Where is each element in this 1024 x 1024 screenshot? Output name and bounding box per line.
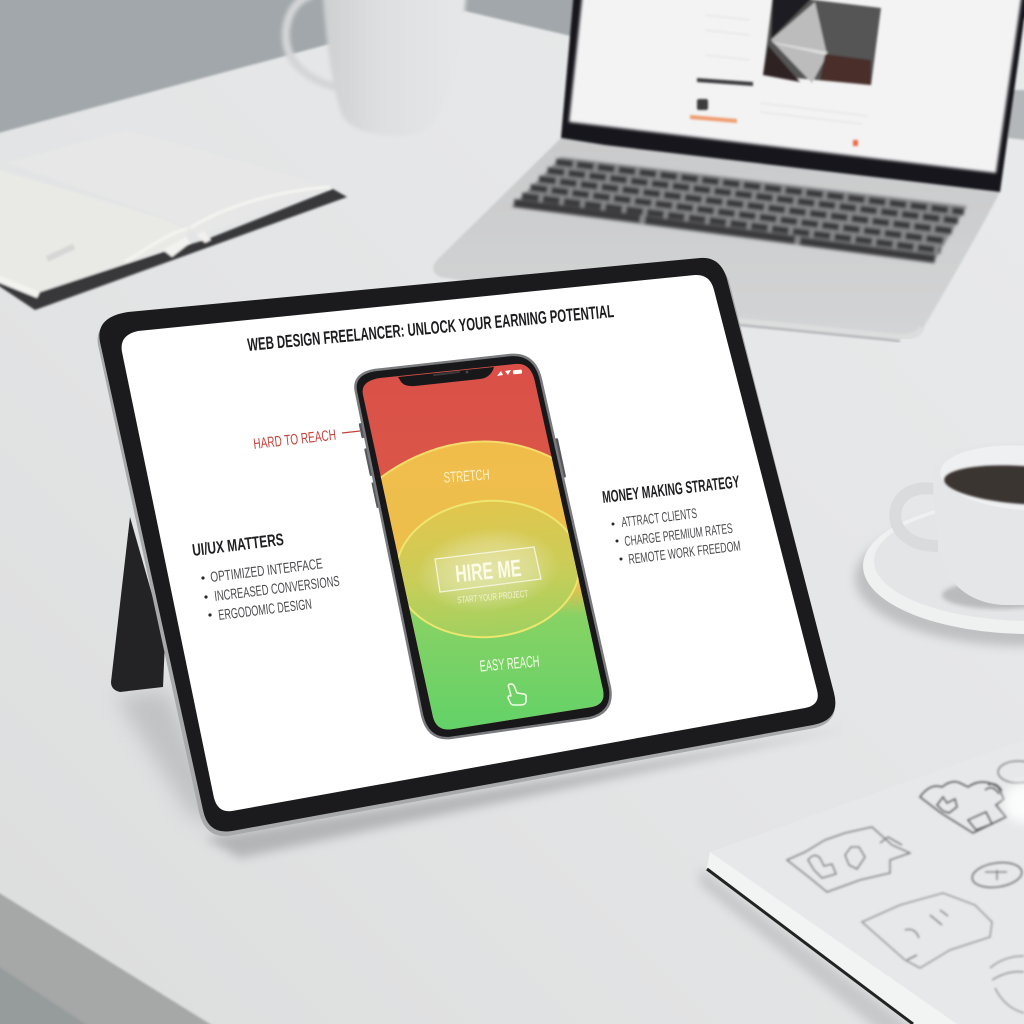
- sketch notebook, bottom right: [700, 740, 1024, 1024]
- title: WEB DESIGN FREELANCER: UNLOCK YOUR EARNING POTENTIAL: [247, 301, 615, 355]
- icon: hand pointer: [508, 684, 526, 705]
- coffee: [943, 461, 1024, 509]
- start your project: START YOUR PROJECT: [457, 589, 529, 606]
- reach ellipse: [398, 500, 579, 638]
- cup rim interior: [938, 440, 1024, 516]
- panel: money making strategy: REMOTE WORK FREEDOM: [627, 537, 742, 567]
- cup body: [933, 442, 1024, 605]
- hard to reach label: HARD TO REACH: [253, 427, 337, 453]
- saucer: [863, 498, 1024, 634]
- coffee mug, top: [286, 0, 467, 136]
- stretch label: STRETCH: [443, 466, 490, 487]
- cup shadow on saucer: [942, 581, 1024, 609]
- cup handle: [895, 488, 938, 546]
- saucer shadow: [855, 510, 1024, 646]
- tablet screen: [122, 275, 818, 811]
- tablet stand: [111, 517, 230, 830]
- panel: UI/UX matters: [191, 530, 341, 624]
- panel: money making strategy: CHARGE PREMIUM RATES: [623, 520, 734, 549]
- phone screen zones: [362, 364, 604, 730]
- panel: money making strategy: [601, 472, 742, 567]
- panel: UI/UX matters: OPTIMIZED INTERFACE: [210, 556, 324, 586]
- panel: UI/UX matters: INCREASED CONVERSIONS: [214, 574, 341, 605]
- status icons: [497, 370, 522, 376]
- laptop screen frame: [561, 0, 1024, 192]
- panel: UI/UX matters: UI/UX MATTERS: [191, 530, 285, 560]
- panel: UI/UX matters: ERGODOMIC DESIGN: [218, 597, 313, 624]
- hire me button: [435, 547, 541, 592]
- laptop base: [433, 138, 1000, 338]
- pencil sketches: [787, 761, 1024, 1013]
- glare: [1004, 783, 1024, 823]
- panel: money making strategy: ATTRACT CLIENTS: [620, 505, 698, 530]
- laptop: [433, 0, 1024, 341]
- open notebook, left: [0, 130, 347, 310]
- phone body: [355, 355, 611, 738]
- tablet shadow: [205, 728, 848, 858]
- phone: [354, 354, 612, 740]
- easy reach label: EASY REACH: [479, 653, 540, 676]
- tablet bezel: [99, 258, 835, 832]
- tablet silver rim: [98, 262, 835, 836]
- keyboard: [511, 157, 967, 263]
- phone side buttons: [359, 423, 566, 508]
- panel: money making strategy: MONEY MAKING STRATEGY: [601, 472, 741, 507]
- notch: [398, 367, 494, 386]
- coffee cup and saucer: [855, 440, 1024, 646]
- hire me button: HIRE ME: [454, 555, 522, 588]
- tablet: [98, 258, 848, 858]
- laptop screen web page: [690, 0, 881, 146]
